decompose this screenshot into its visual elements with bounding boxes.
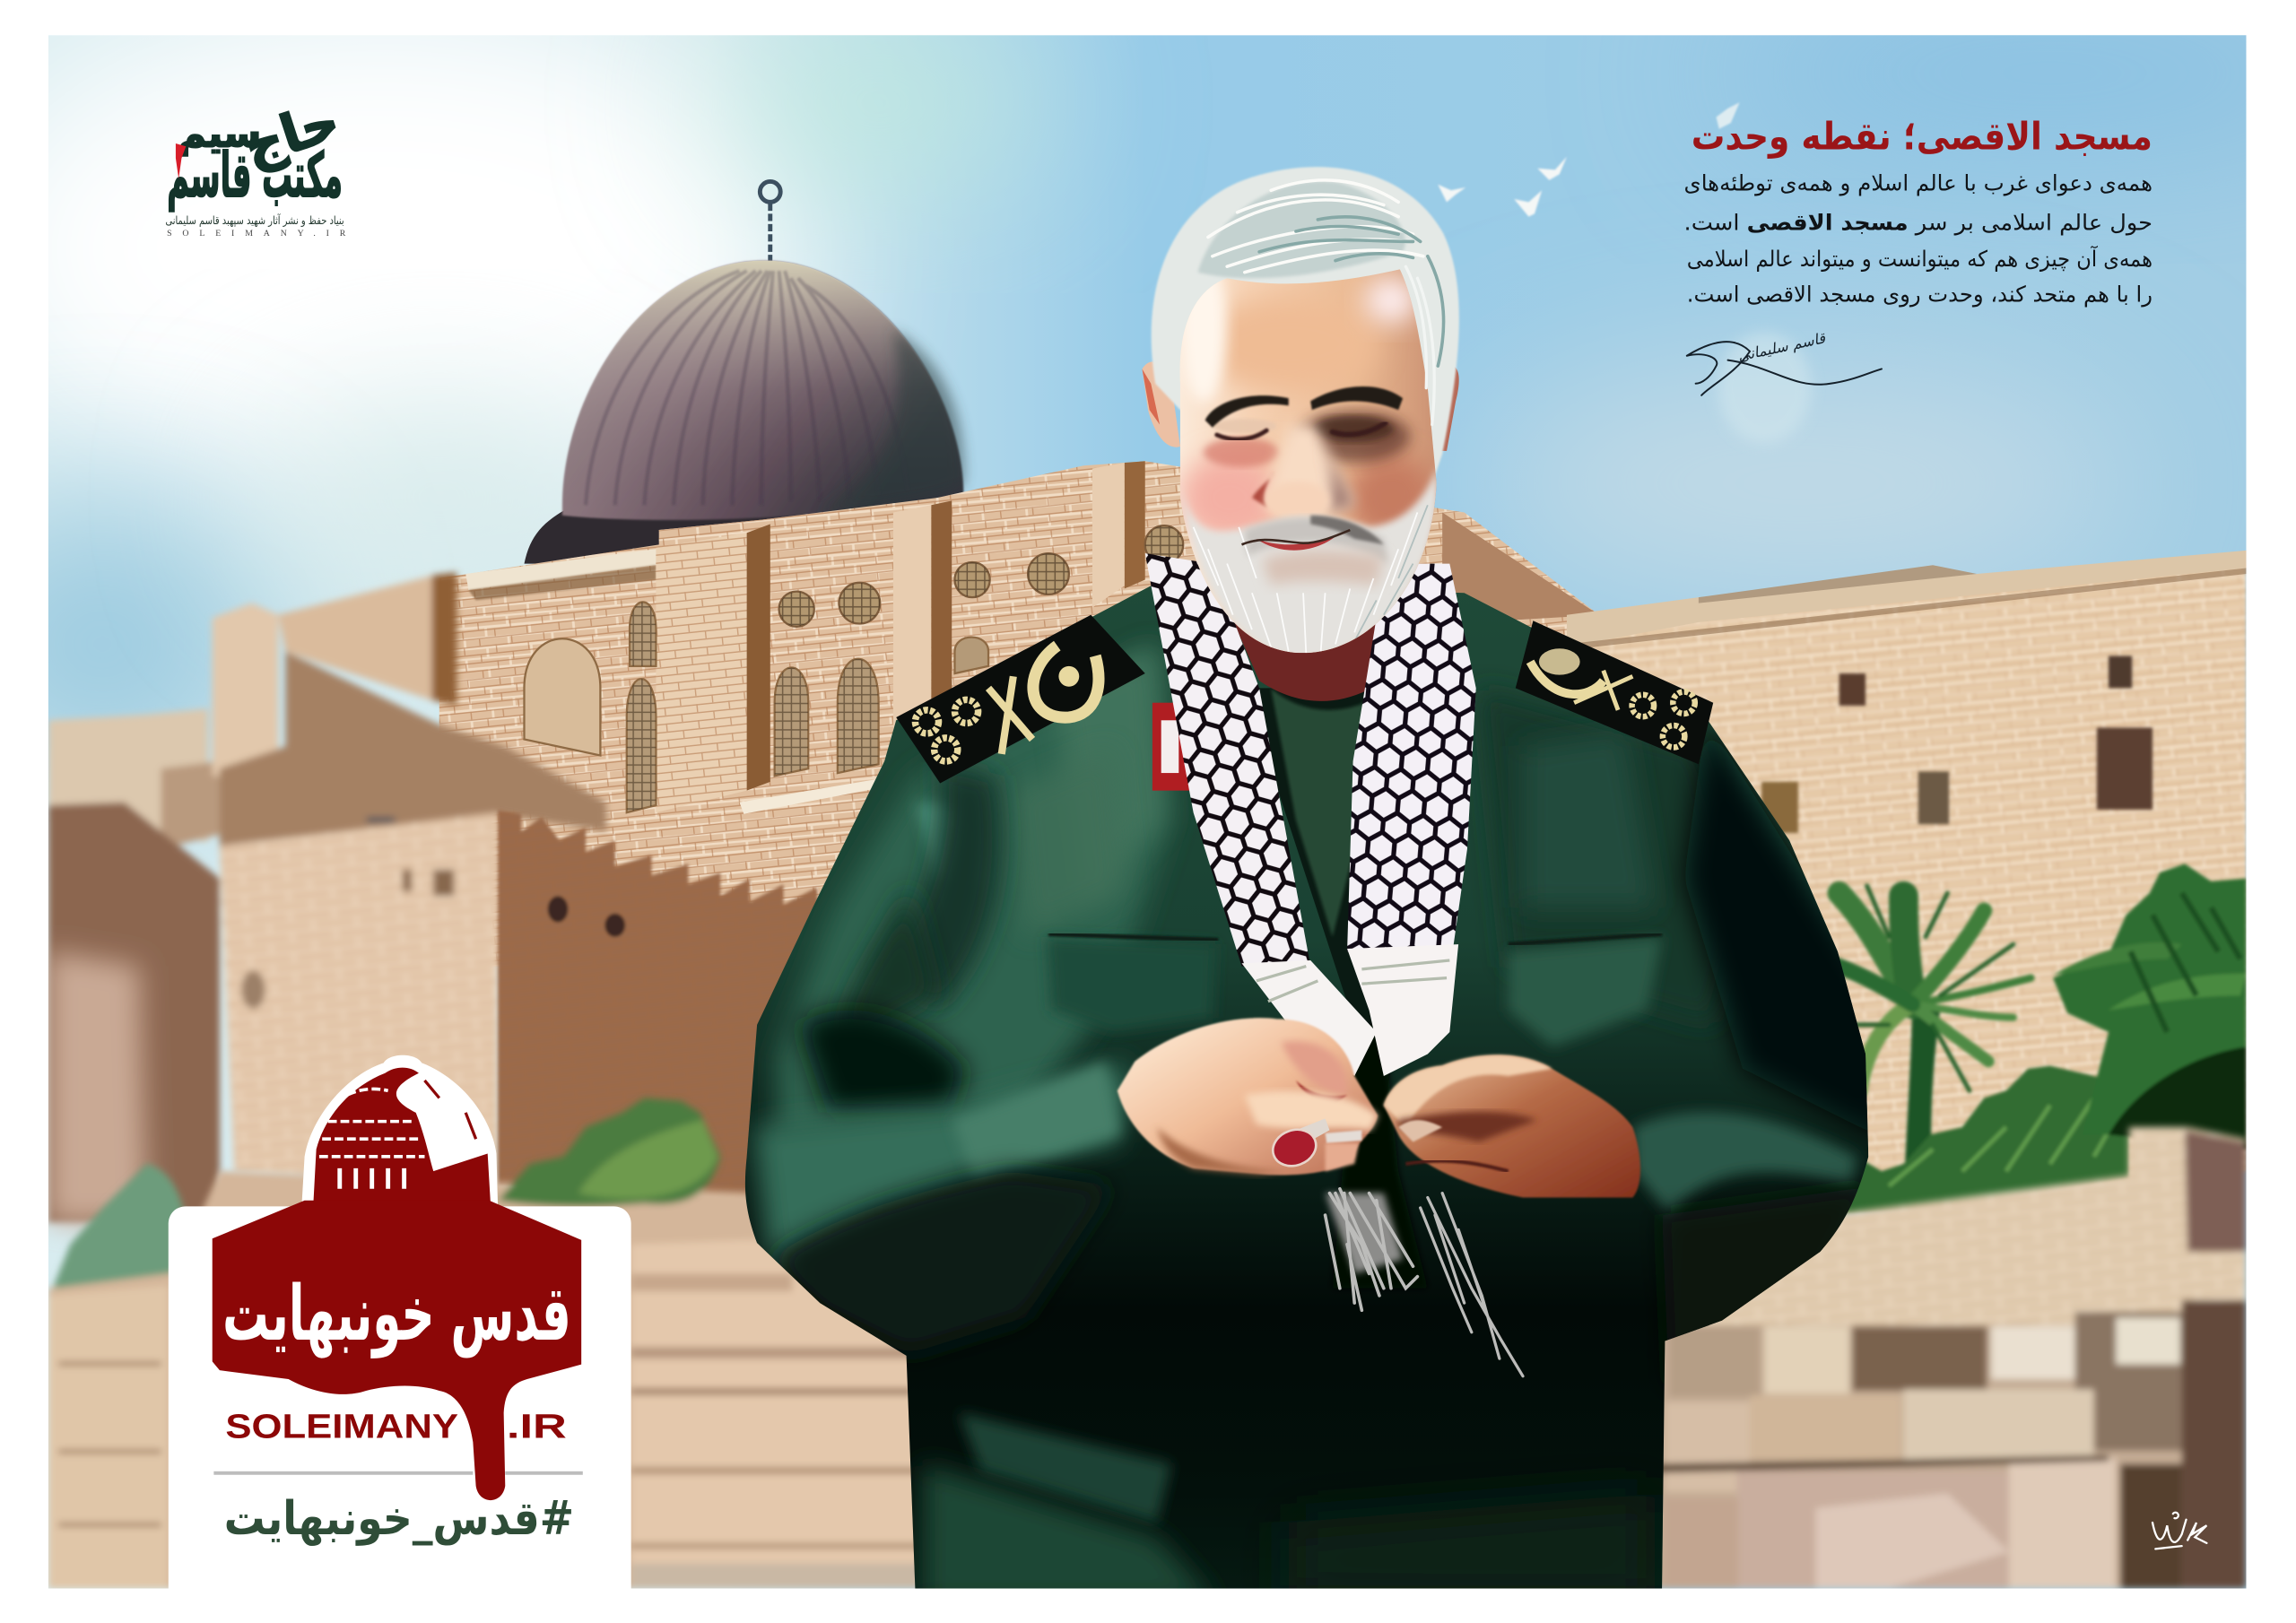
quote body text [1684,169,2152,307]
red collar tab [1152,703,1194,791]
dome emblem [301,1055,498,1206]
signature: قاسم سلیمانی [1736,329,1828,365]
left walls blurred [48,572,606,1222]
headline: مسجد الاقصی؛ نقطه وحدت [1692,116,2152,160]
main mosque wall [439,461,1599,967]
divider right [505,1471,583,1475]
eyebrows [1205,386,1403,428]
cornice [1567,551,2246,647]
ears [1142,361,1180,447]
artist signature [2152,1513,2206,1549]
right sleeve [1632,1112,1857,1215]
finial [760,181,780,261]
quote body text: همه‌ی دعوای غرب با عالم اسلام و همه‌ی توطئه‌های [1684,169,2152,195]
birds [1438,102,1740,217]
back hair [1152,167,1459,498]
logo caption: بنیاد حفظ و نشر آثار شهید سپهبد قاسم سلیمانی [165,213,344,228]
ring [1268,1118,1329,1172]
left epaulette [896,615,1145,783]
beard [1180,465,1438,659]
soldier figure [732,167,1889,1603]
top left logo [165,89,347,239]
foreground ground and stairs on the left [48,1098,937,1588]
quote body text: همه‌ی آن چیزی هم که میتوانست و میتواند عالم اسلامی [1687,246,2152,272]
right chest [1479,688,1743,1025]
lips [1257,533,1340,551]
retaining wall and stones on the right [1655,1127,2246,1588]
logo domain: .IR [507,1407,567,1445]
sloped roof by the shoulder [1442,512,1599,622]
bottom [959,1413,1171,1523]
right hand [1384,1055,1640,1198]
card [169,1206,631,1588]
round windows [779,525,1183,627]
hashtag: #قدس_خونبهایت [224,1492,574,1546]
fringes [1326,1189,1523,1376]
arched windows [524,602,988,812]
pier [656,533,747,812]
left hand [1118,1018,1378,1176]
right epaulette [1516,621,1713,764]
jacket [732,571,1889,1603]
windows [1761,655,2152,833]
mosque dome [524,181,965,564]
logo calligraphy [167,89,347,212]
crenellated brown wall [498,810,820,1201]
signature [1687,329,1882,395]
bushes [498,1098,720,1206]
eyes [1217,423,1385,439]
left shoulder and chest light folds [776,644,1171,1141]
logo web address: SOLEIMANY.IR [167,229,346,239]
quote body text: را با هم متحد کند، وحدت روی مسجد الاقصی است. [1687,281,2152,307]
divider left [213,1471,473,1475]
keffiyeh scarf [1145,553,1476,1076]
logo calligraphy: مکتب قاسم [167,140,343,212]
neck [1208,564,1405,701]
quote body text: حول عالم اسلامی بر سر مسجد الاقصی است. [1684,209,2152,235]
face [1157,249,1465,673]
pocket right [1509,937,1662,1046]
palm trees and bushes [1815,864,2246,1215]
banner calligraphy: قدس خونبهایت [222,1270,571,1358]
logo blood drip [176,143,186,178]
logo calligraphy: حاج [237,89,347,178]
center opening [1245,688,1413,1113]
red banner with drip [213,1201,581,1500]
logo calligraphy: سیم [178,112,261,156]
bottom left logo card [169,1055,631,1588]
logo site name: SOLEIMANY [225,1407,458,1445]
head [1142,167,1465,673]
front hair strands [1198,180,1444,424]
pocket left [1047,937,1215,1032]
right wall [1567,551,2246,1215]
